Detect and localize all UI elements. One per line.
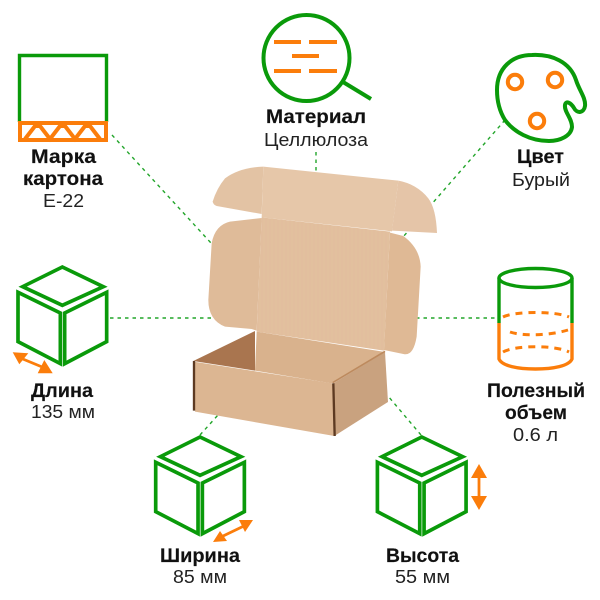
label: color <box>512 147 570 190</box>
label: usable volume <box>487 381 585 445</box>
icon: corrugated cardboard <box>20 56 106 140</box>
right wall <box>333 352 388 436</box>
dashed connector: material to box <box>315 152 317 172</box>
label: color: Цвет <box>517 147 564 168</box>
corner edges <box>194 361 335 436</box>
corrugation texture <box>257 217 390 351</box>
label: length: Длина <box>31 381 93 402</box>
lid center panel <box>262 167 398 231</box>
inner left flap <box>208 218 262 331</box>
icon: cube with length arrow <box>13 267 107 373</box>
icon: cube with height arrow <box>377 437 487 534</box>
label: cardboard grade: картона <box>23 169 103 190</box>
rim highlight <box>333 351 385 383</box>
front wall <box>193 362 334 436</box>
label: material: Материал <box>266 107 366 128</box>
label: material <box>264 107 369 150</box>
label: material: Целлюлоза <box>264 130 369 150</box>
label: height <box>386 546 459 587</box>
label: height: 55 мм <box>395 567 450 587</box>
panel: color <box>497 55 585 190</box>
dashed connector: width to box <box>200 415 218 435</box>
dashed connector: length to box <box>110 317 212 319</box>
lid left flap <box>213 167 263 214</box>
icon: palette <box>497 55 585 141</box>
panel: cardboard grade <box>20 56 106 211</box>
dashed connector: color to box <box>403 120 505 237</box>
panel: material <box>264 15 371 150</box>
lid right flap <box>392 181 437 233</box>
panel: usable volume <box>487 268 585 445</box>
icon: cube with width arrow <box>156 437 253 542</box>
icon: magnifier <box>264 15 371 101</box>
dashed connector: height to box <box>388 396 421 435</box>
icon: cylinder <box>499 268 572 369</box>
label: height: Высота <box>386 546 459 567</box>
panel: height <box>377 437 487 587</box>
panel: width <box>156 437 253 587</box>
label: cardboard grade: Е-22 <box>43 191 84 211</box>
left inner wall <box>193 331 255 371</box>
label: usable volume: 0.6 л <box>513 425 558 445</box>
label: length <box>31 381 95 422</box>
label: length: 135 мм <box>31 402 95 422</box>
label: color: Бурый <box>512 170 570 190</box>
back inner wall <box>255 332 385 383</box>
inner lid panel <box>257 217 390 351</box>
panel: length <box>13 267 107 422</box>
dashed connector: volume to box <box>416 317 497 319</box>
label: usable volume: объем <box>505 403 567 424</box>
label: width <box>160 546 240 587</box>
label: cardboard grade <box>23 147 103 211</box>
open cardboard box photo <box>193 167 437 436</box>
label: cardboard grade: Марка <box>31 147 96 168</box>
label: width: Ширина <box>160 546 240 567</box>
label: usable volume: Полезный <box>487 381 585 402</box>
label: width: 85 мм <box>173 567 227 587</box>
inner right flap <box>384 233 421 354</box>
dashed connector: brand to box <box>112 135 211 243</box>
